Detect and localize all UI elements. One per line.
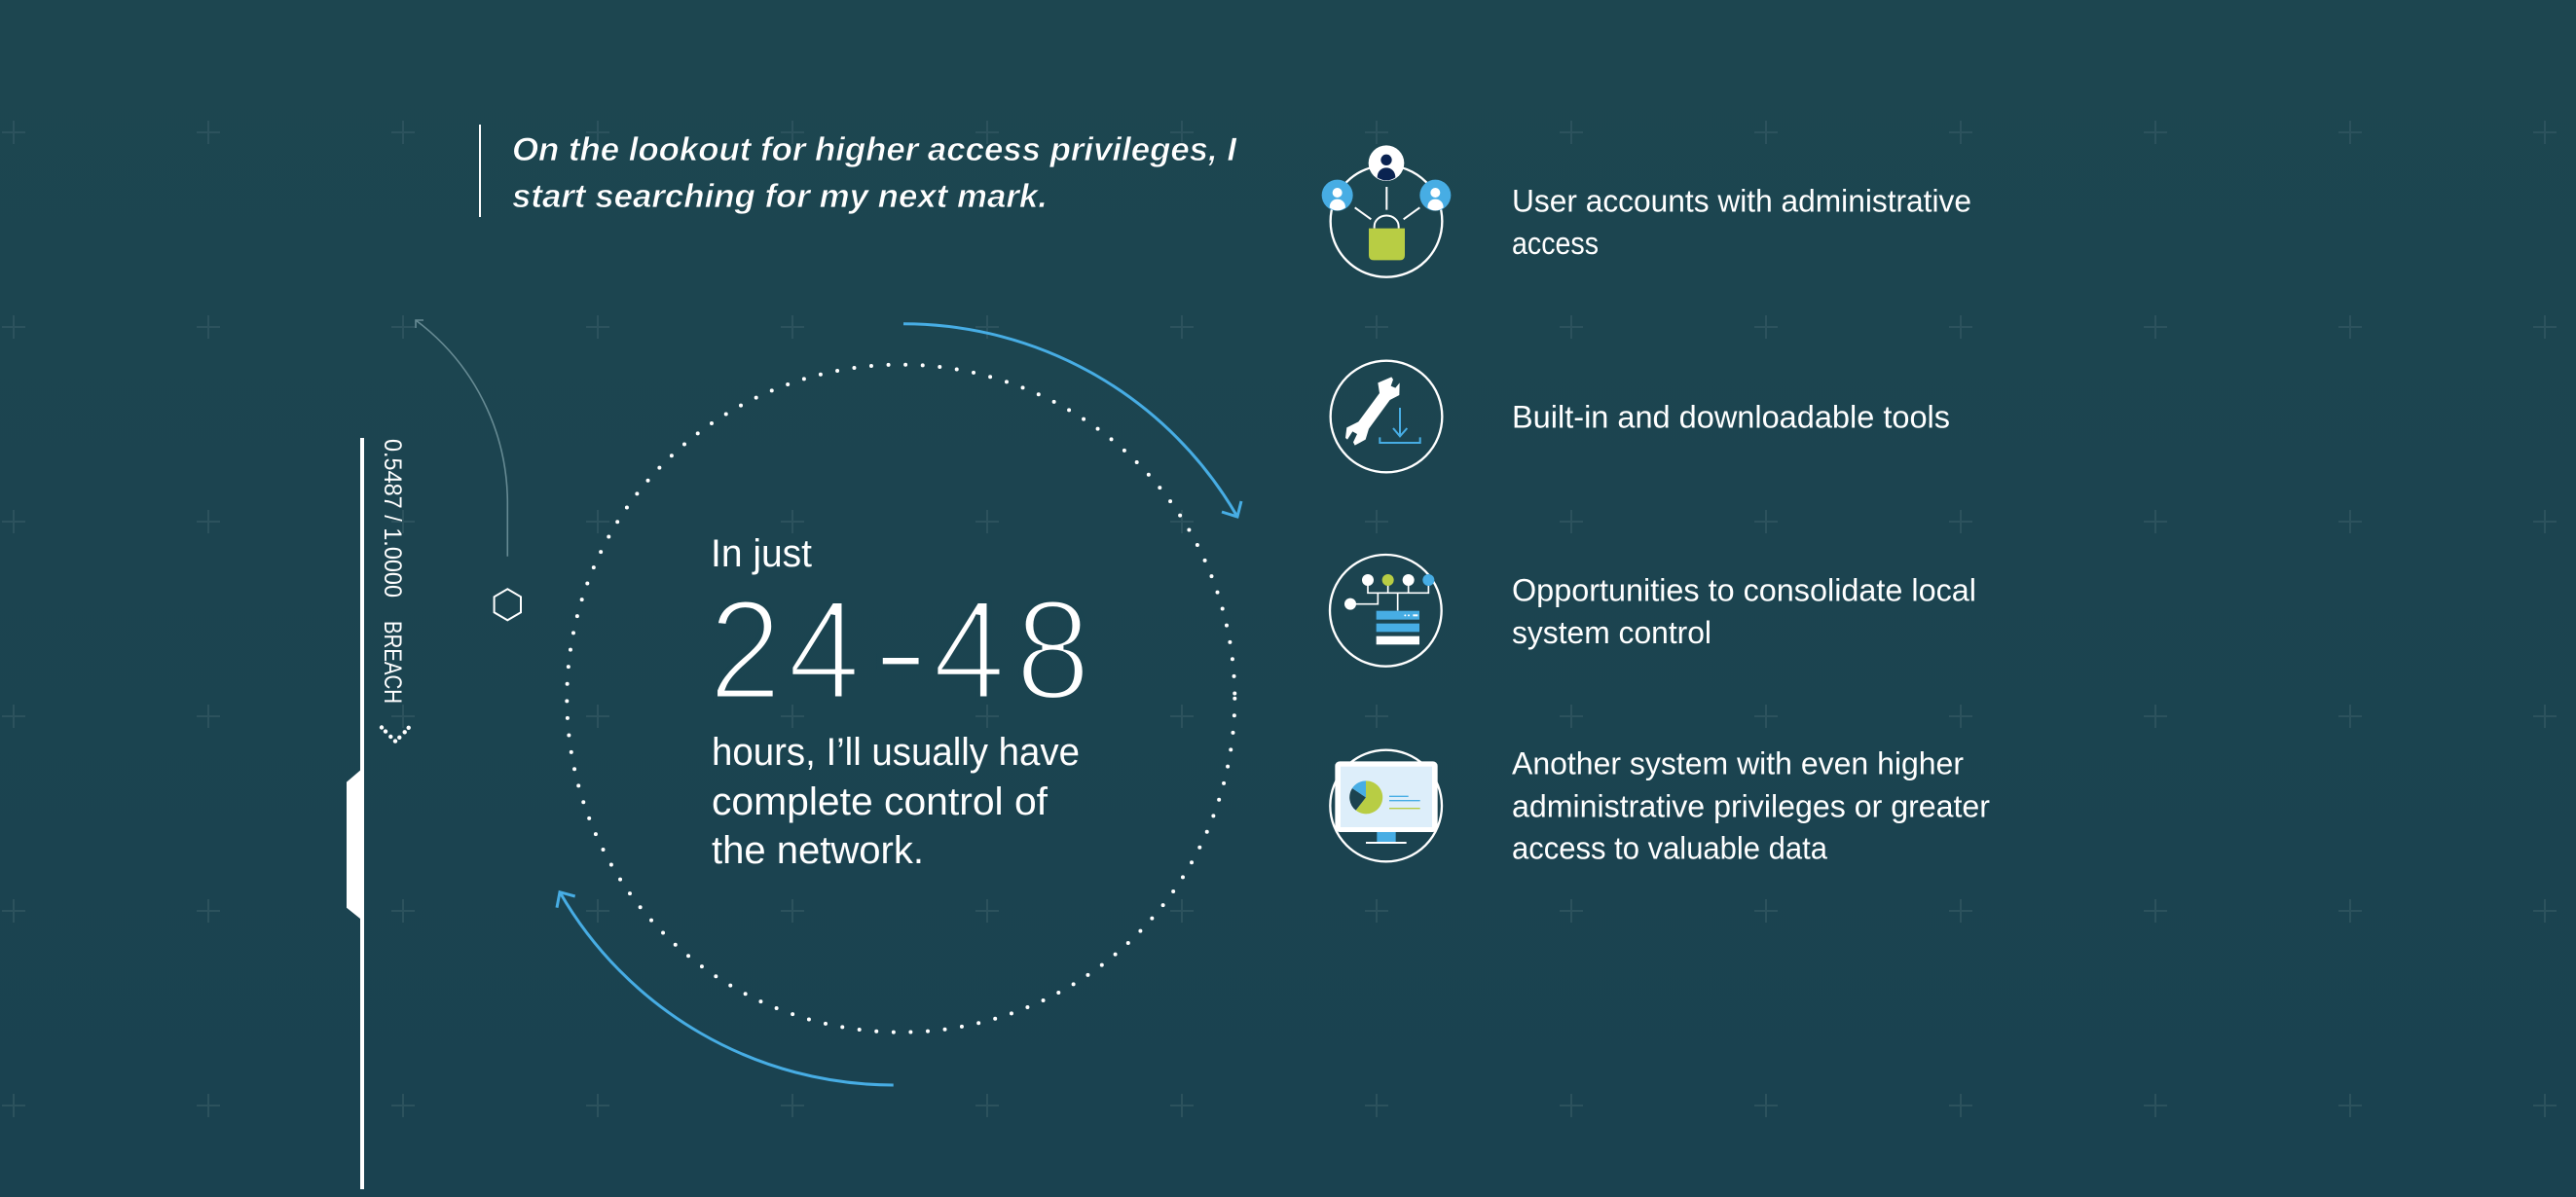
arrow: grey curved arrow	[416, 320, 507, 557]
closing text: hours, I’ll usually have	[712, 731, 1080, 774]
vertical progress label: BREACH	[379, 621, 406, 704]
quote text: start searching for my next mark.	[512, 178, 1048, 215]
closing text	[712, 731, 1080, 872]
closing text: the network.	[712, 829, 924, 872]
icon: wrench and download	[1331, 361, 1442, 472]
text: higher privileges: access to valuable data	[1512, 831, 1827, 866]
closing text: complete control of	[712, 780, 1049, 823]
text: higher privileges: administrative privileges or greater	[1512, 788, 1990, 823]
text: higher privileges	[1512, 746, 1990, 866]
text: consolidate control: system control	[1512, 615, 1711, 650]
icon: monitor with pie chart	[1330, 750, 1442, 861]
dotted circle	[567, 365, 1234, 1033]
icon: dotted chevron	[380, 725, 411, 744]
icon: hexagon	[495, 589, 521, 620]
big number: 4	[788, 570, 861, 729]
big number: -	[872, 571, 929, 730]
text: higher privileges: Another system with even higher	[1512, 746, 1964, 781]
quote text	[512, 131, 1238, 215]
big number: 8	[1015, 571, 1090, 730]
text: consolidate control	[1512, 573, 1976, 650]
vertical progress label: 0.5487 / 1.0000	[379, 439, 406, 598]
quote text: On the lookout for higher access privileges, I	[512, 131, 1238, 168]
icon: user accounts and lock	[1322, 145, 1451, 277]
text: user accounts	[1512, 184, 1971, 261]
quote bar	[479, 125, 481, 217]
arrow: top blue arc	[903, 324, 1241, 517]
arrow: bottom blue arc	[557, 892, 894, 1085]
lead-in text: In just	[711, 532, 812, 575]
big number: 2	[709, 570, 782, 729]
icon: network and server	[1330, 555, 1442, 667]
text: user accounts: User accounts with administrative	[1512, 184, 1971, 219]
text: user accounts: access	[1512, 226, 1599, 261]
text: consolidate control: Opportunities to consolidate local	[1512, 573, 1976, 608]
big number	[709, 570, 1090, 730]
central statement	[709, 532, 1090, 872]
progress rail	[347, 438, 364, 1189]
text: tools: Built-in and downloadable tools	[1512, 399, 1950, 434]
vertical progress label	[379, 439, 406, 704]
big number: 4	[933, 570, 1006, 729]
